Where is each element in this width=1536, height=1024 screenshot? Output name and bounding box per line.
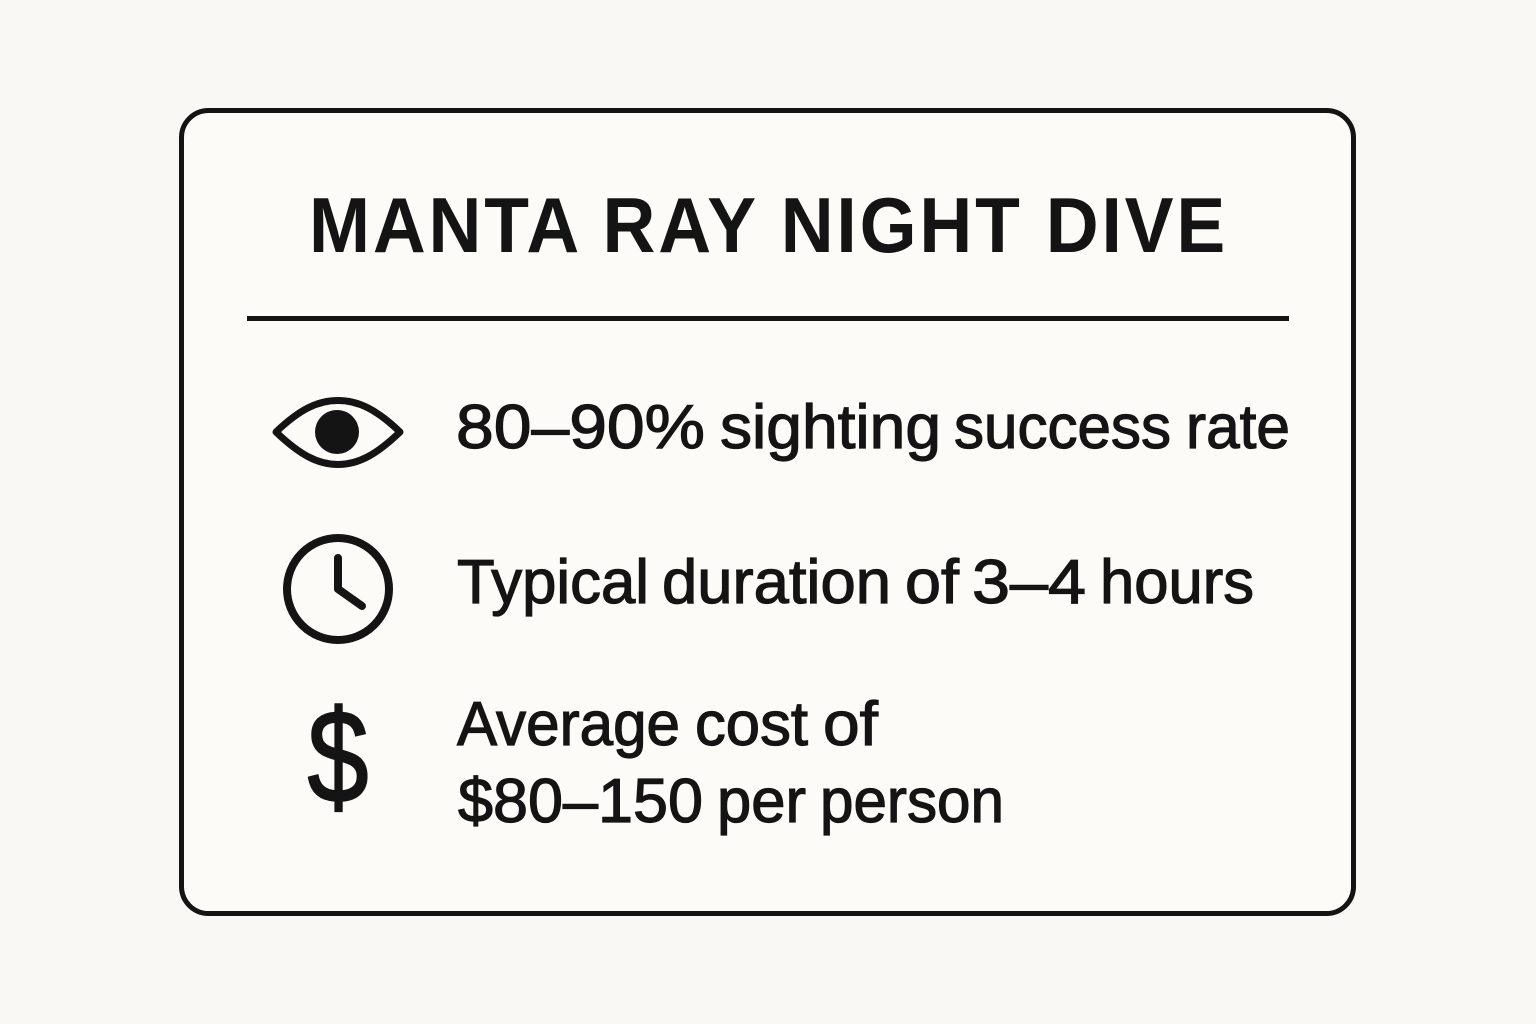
text: typical duration: hours	[1100, 548, 1254, 617]
text: average cost	[457, 690, 1004, 836]
text: sighting success rate: 80–90%	[456, 393, 705, 462]
text: typical duration: Typical	[457, 548, 649, 617]
title: MANTA RAY NIGHT DIVE	[309, 181, 1228, 269]
text: average cost: $80–150	[458, 767, 703, 836]
panel: info card	[182, 110, 1354, 914]
text: typical duration	[457, 548, 1254, 617]
text: typical duration: 3–4	[972, 548, 1086, 617]
text: typical duration: of	[905, 548, 960, 617]
text: average cost: of	[823, 690, 879, 759]
text: average cost: Average	[457, 690, 680, 759]
icon: dollar sign: $	[308, 683, 368, 830]
text: typical duration: duration	[662, 548, 891, 617]
icon: eye	[276, 400, 400, 464]
text: sighting success rate: success	[954, 393, 1171, 462]
icon: clock	[287, 538, 389, 640]
text: sighting success rate	[456, 393, 1290, 462]
text: sighting success rate: sighting	[720, 393, 941, 462]
text: average cost: cost	[695, 690, 808, 759]
text: average cost: per	[717, 767, 806, 836]
text: average cost: person	[820, 767, 1004, 836]
text: sighting success rate: rate	[1186, 393, 1290, 462]
